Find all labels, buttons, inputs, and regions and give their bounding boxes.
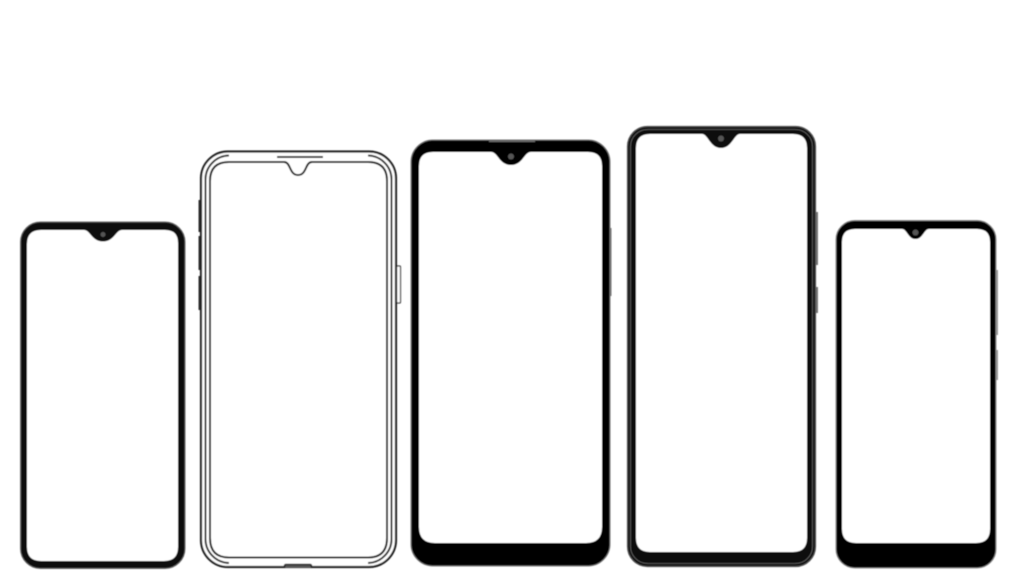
phone 3 top strip bbox=[489, 140, 535, 142]
phone 4 screen bbox=[636, 134, 807, 552]
phone 3 screen bbox=[419, 152, 602, 543]
phone 2: line-art outline bbox=[198, 152, 400, 568]
phone 1 screen bbox=[27, 230, 178, 561]
phone 4 side buttons bbox=[814, 212, 818, 265]
phone 4: double-edged bezel bbox=[628, 126, 818, 566]
phone 2 speaker line bbox=[277, 156, 323, 158]
phone 2 screen with notch outline bbox=[210, 162, 387, 558]
phone 5 camera bbox=[912, 230, 918, 236]
phone 2 body outlines bbox=[201, 152, 396, 567]
phone 2 bottom port bbox=[284, 564, 312, 568]
phone 2 side buttons bbox=[198, 200, 202, 310]
phone 3 camera bbox=[508, 154, 514, 160]
phone 1: thin bezel with teardrop notch bbox=[20, 222, 185, 568]
phone 3 side button bbox=[609, 228, 612, 296]
phone 1 camera bbox=[100, 232, 106, 237]
phone 3: heavy bezel with thick chin bbox=[411, 140, 612, 566]
phone 4 camera bbox=[718, 136, 724, 142]
phone 5 screen bbox=[842, 229, 990, 543]
phone 5 side buttons bbox=[995, 270, 998, 335]
phone 5: small phone with thick chin bbox=[836, 220, 998, 568]
